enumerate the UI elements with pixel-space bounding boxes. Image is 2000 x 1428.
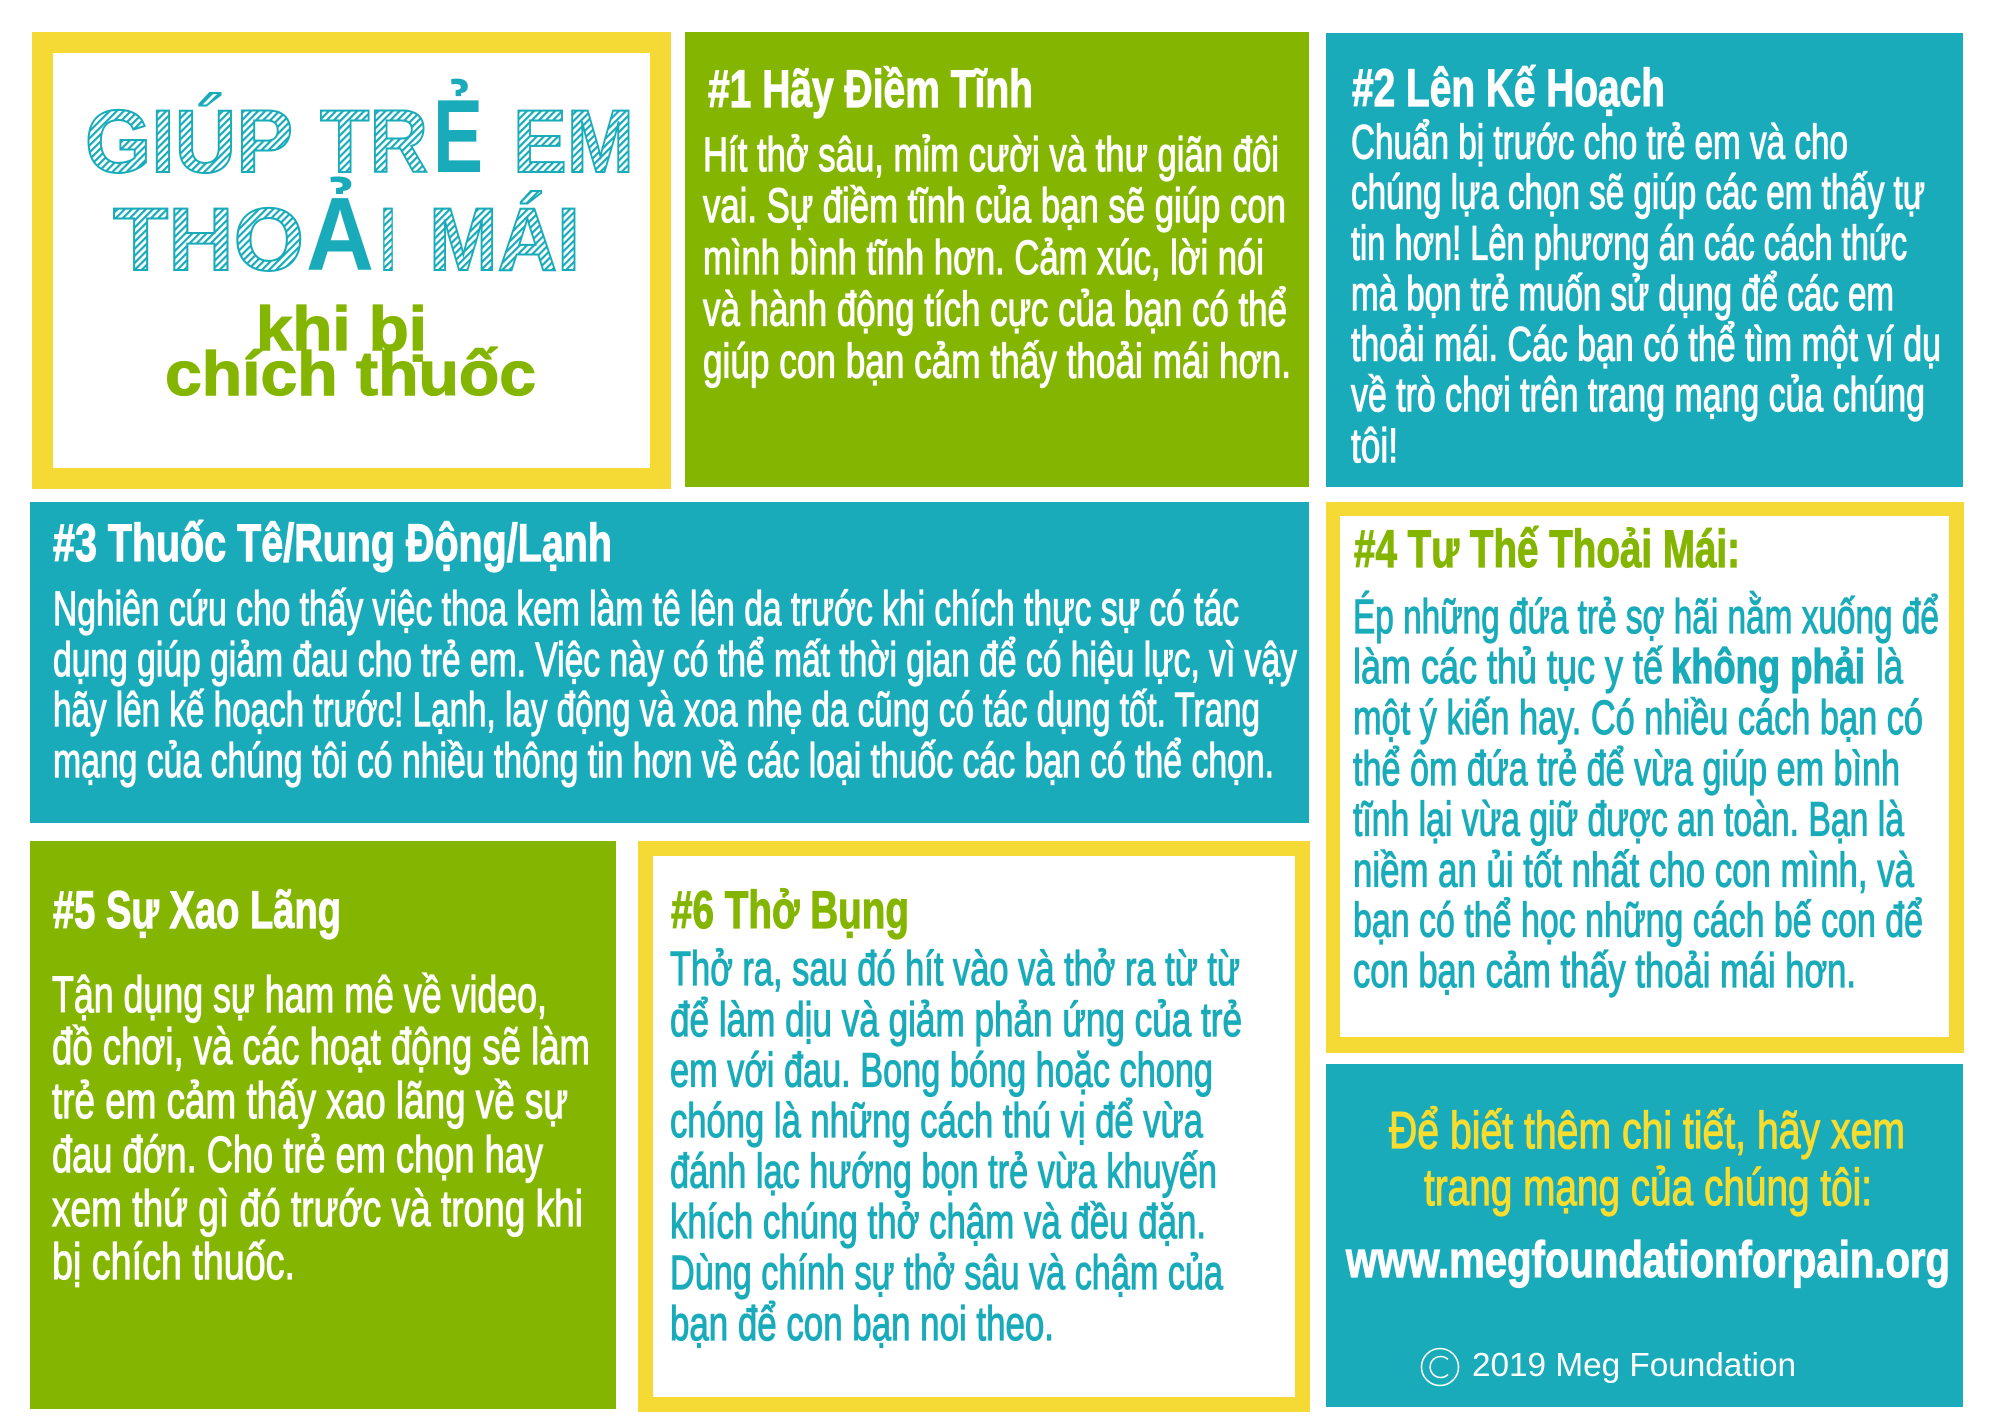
heading #2: #2 Lên Kế Hoạch [1352,59,1665,118]
title: Giúp trẻ em thoải mái [85,78,634,293]
subtitle: khi bị chích thuốc [165,295,536,409]
text block #6: Thở ra, sau đó hít vào và thở ra từ từ [670,943,1240,996]
heading #6: #6 Thở Bụng [671,881,909,940]
text block #6: Dùng chính sự thở sâu và chậm của [670,1247,1223,1300]
title: Giúp trẻ em thoải mái: Ẻ [433,78,483,195]
text block #3: mạng của chúng tôi có nhiều thông tin hơn về các loại thuốc các bạn có thể chọn. [53,735,1274,788]
text block #6: em với đau. Bong bóng hoặc chong [670,1044,1213,1098]
panel: #2 make a plan [1326,33,1963,487]
text block #3 [53,583,1297,788]
panel: #6 belly breathing [638,841,1310,1412]
heading #3: #3 Thuốc Tê/Rung Động/Lạnh [53,514,612,573]
text block #3: hãy lên kế hoạch trước! Lạnh, lay động và xoa nhẹ da cũng có tác dụng tốt. Trang [53,684,1260,737]
text block #1: giúp con bạn cảm thấy thoải mái hơn. [703,336,1291,388]
text block #5: bị chích thuốc. [52,1233,295,1290]
text block #1: mình bình tĩnh hơn. Cảm xúc, lời nói [703,232,1264,285]
text block #4 [1353,590,1939,998]
panel: #3 numbing, vibration, cold [30,502,1309,823]
text block #6: để làm dịu và giảm phản ứng của trẻ [670,994,1242,1047]
text block #6: khích chúng thở chậm và đều đặn. [670,1196,1206,1249]
text block #3: dụng giúp giảm đau cho trẻ em. Việc này có thể mất thời gian để có hiệu lực, vì vậy [53,634,1297,687]
text block #1: và hành động tích cực của bạn có thể [703,284,1287,336]
subtitle: khi bị chích thuốc: khi bị [256,295,427,364]
text block #5: Tận dụng sự ham mê về video, [52,966,547,1023]
title: Giúp trẻ em thoải mái: GIÚP [85,91,293,191]
text block #5: đồ chơi, và các hoạt động sẽ làm [52,1018,590,1075]
text block #5: đau đớn. Cho trẻ em chọn hay [52,1126,543,1183]
text block #6: chóng là những cách thú vị để vừa [670,1095,1203,1148]
title: Giúp trẻ em thoải mái: TR [320,91,428,191]
icon: copyright [1422,1348,1458,1386]
title: Giúp trẻ em thoải mái: EM [513,91,634,191]
panel: #5 distraction [30,841,616,1409]
text block #5: xem thứ gì đó trước và trong khi [52,1180,583,1237]
panel: website and copyright [1326,1064,1963,1407]
text block #4: làm các thủ tục y tế [1353,641,1663,694]
callout: more details [1389,1102,1905,1217]
text block #5: trẻ em cảm thấy xao lãng về sự [52,1072,568,1129]
panel: #1 stay calm [685,32,1309,487]
text block #1 [703,129,1291,388]
text block #2: tôi! [1351,420,1398,473]
title: Giúp trẻ em thoải mái: MÁI [429,189,580,289]
text block #4: không phải [1671,641,1865,694]
title: Giúp trẻ em thoải mái: I [380,189,396,289]
text block #3: Nghiên cứu cho thấy việc thoa kem làm tê lên da trước khi chích thực sự có tác [53,583,1239,636]
subtitle: khi bị chích thuốc: chích thuốc [165,340,536,409]
heading #5: #5 Sự Xao Lãng [53,881,341,940]
text block #6 [670,943,1242,1351]
text block #6: đánh lạc hướng bọn trẻ vừa khuyến [670,1146,1217,1198]
text block #4: là [1876,641,1903,694]
panel: #4 comfort position [1326,502,1964,1053]
text block #6: bạn để con bạn noi theo. [670,1298,1054,1351]
panel: title [32,32,671,489]
copyright text: 2019 Meg Foundation [1472,1346,1796,1383]
text block #2 [1351,116,1941,473]
heading #1: #1 Hãy Điềm Tĩnh [708,60,1033,119]
text block #1: Hít thở sâu, mỉm cười và thư giãn đôi [703,129,1279,182]
heading #4: #4 Tư Thế Thoải Mái: [1354,520,1740,579]
text block #5 [52,966,590,1290]
title: Giúp trẻ em thoải mái: Ả [306,177,374,293]
text block #1: vai. Sự điềm tĩnh của bạn sẽ giúp con [703,180,1286,233]
title: Giúp trẻ em thoải mái: THO [113,189,304,289]
